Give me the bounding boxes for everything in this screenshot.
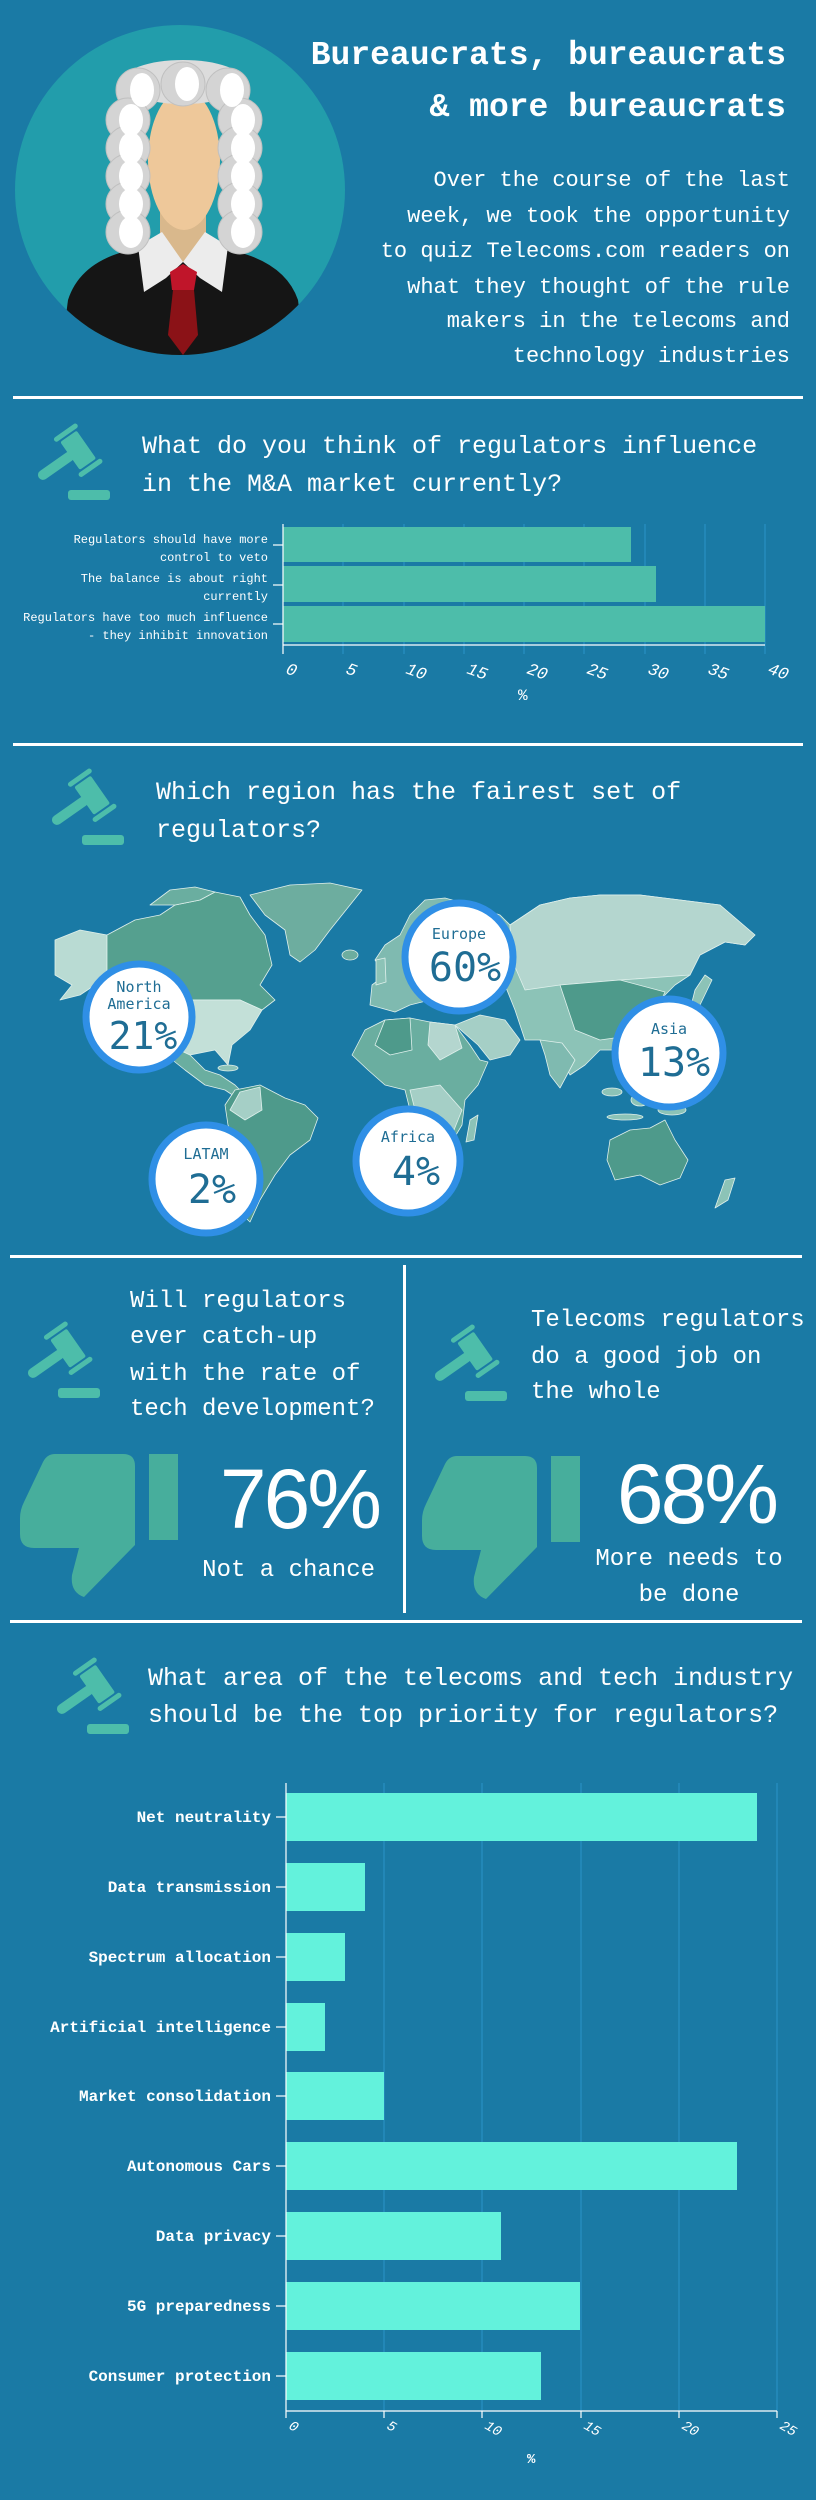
- intro text: Over the course of the last: [434, 168, 790, 193]
- bar chart: regulator priorities: Artificial intelligence: [50, 2019, 271, 2037]
- heading: priority question: What area of the telecoms and tech industry: [148, 1664, 793, 1693]
- panel: catch-up question: Not a chance: [202, 1557, 375, 1584]
- bar chart: regulator priorities: Autonomous Cars: [127, 2158, 271, 2176]
- intro text: [381, 168, 790, 369]
- intro text: what they thought of the rule: [407, 275, 790, 300]
- callout: LATAM 2%: 2%: [188, 1167, 236, 1213]
- bar chart: M&A influence: %: [518, 687, 528, 705]
- bar chart: M&A influence: - they inhibit innovation: [88, 629, 268, 643]
- callout: Asia 13%: 13%: [638, 1040, 710, 1086]
- intro text: week, we took the opportunity: [407, 204, 790, 229]
- bar chart: regulator priorities: Net neutrality: [137, 1809, 271, 1827]
- bar chart: M&A influence: 10: [403, 661, 429, 686]
- callout: North America 21%: 21%: [109, 1014, 177, 1058]
- intro text: technology industries: [513, 344, 790, 369]
- panel: catch-up question: ever catch-up: [130, 1324, 317, 1351]
- title: & more bureaucrats: [430, 89, 786, 126]
- callout: Asia 13%: Asia: [651, 1020, 687, 1038]
- heading: M&A question: in the M&A market currently?: [142, 470, 562, 499]
- callout: North America 21%: North: [116, 978, 162, 996]
- heading: priority question: should be the top priority for regulators?: [148, 1701, 778, 1730]
- bar chart: regulator priorities: 5G preparedness: [127, 2298, 271, 2316]
- bar chart: M&A influence: The balance is about right: [81, 572, 268, 586]
- bar chart: regulator priorities: 25: [776, 2418, 800, 2441]
- callout: Europe 60%: 60%: [429, 945, 501, 991]
- callout: North America 21%: [86, 964, 192, 1070]
- bar chart: M&A influence: [23, 524, 791, 705]
- panel: good job question: do a good job on: [531, 1344, 761, 1371]
- icon: gavel priority: [44, 1657, 129, 1734]
- panel: good job question: 68%: [617, 1447, 776, 1541]
- panel: good job question: be done: [639, 1582, 739, 1609]
- icon: gavel region: [39, 768, 124, 845]
- world map: [55, 883, 755, 1222]
- bar chart: M&A influence: 30: [645, 661, 671, 686]
- bar chart: M&A influence: 0: [283, 661, 299, 682]
- icon: gavel M&A: [25, 423, 110, 500]
- panel: catch-up question: with the rate of: [130, 1361, 360, 1388]
- heading: M&A question: What do you think of regulators influence: [142, 432, 757, 461]
- bar chart: M&A influence: 40: [765, 661, 791, 686]
- heading: region question: regulators?: [156, 816, 321, 845]
- callout: LATAM 2%: LATAM: [183, 1145, 229, 1163]
- bar chart: regulator priorities: 20: [678, 2418, 701, 2441]
- title: Bureaucrats, bureaucrats: [311, 37, 786, 74]
- heading: M&A question: [142, 432, 757, 499]
- heading: priority question: [148, 1664, 793, 1730]
- callout: Africa 4%: 4%: [392, 1149, 440, 1195]
- panel: good job question: Telecoms regulators: [531, 1307, 805, 1334]
- bar chart: regulator priorities: Consumer protection: [89, 2368, 271, 2386]
- heading: region question: Which region has the fairest set of: [156, 778, 681, 807]
- bar chart: M&A influence: 15: [464, 661, 490, 686]
- bar chart: regulator priorities: 15: [580, 2418, 604, 2441]
- bar chart: M&A influence: control to veto: [160, 551, 268, 565]
- callout: Africa 4%: [356, 1109, 460, 1213]
- panel: catch-up question: tech development?: [130, 1396, 375, 1423]
- bar chart: regulator priorities: Spectrum allocation: [89, 1949, 271, 1967]
- bar chart: M&A influence: 5: [343, 661, 359, 682]
- callout: Africa 4%: Africa: [381, 1128, 435, 1146]
- heading: region question: [156, 778, 681, 845]
- panel: good job question: the whole: [531, 1379, 661, 1406]
- panel: catch-up question: [15, 1288, 379, 1597]
- panel: catch-up question: Will regulators: [130, 1288, 346, 1315]
- bar chart: regulator priorities: 10: [482, 2418, 504, 2441]
- callout: LATAM 2%: [152, 1125, 260, 1233]
- bar chart: M&A influence: currently: [203, 590, 268, 604]
- intro text: makers in the telecoms and: [447, 309, 790, 334]
- bar chart: M&A influence: 35: [705, 661, 731, 686]
- icon: gavel good job: [422, 1324, 507, 1401]
- bar chart: regulator priorities: Data privacy: [156, 2228, 271, 2246]
- callout: North America 21%: America: [107, 995, 171, 1013]
- bar chart: regulator priorities: Data transmission: [108, 1879, 271, 1897]
- illustration: judge: [15, 25, 345, 355]
- panel: good job question: More needs to: [595, 1546, 783, 1573]
- bar chart: regulator priorities: 0: [286, 2418, 301, 2437]
- panel: good job question: [422, 1307, 805, 1609]
- callout: Asia 13%: [615, 999, 723, 1107]
- bar chart: M&A influence: Regulators have too much influence: [23, 611, 268, 625]
- bar chart: M&A influence: 20: [524, 661, 550, 686]
- bar chart: regulator priorities: %: [527, 2452, 536, 2468]
- panel: catch-up question: 76%: [220, 1452, 379, 1546]
- bar chart: regulator priorities: [50, 1783, 800, 2468]
- callout: Europe 60%: [405, 903, 513, 1011]
- callout: Europe 60%: Europe: [432, 925, 486, 943]
- bar chart: M&A influence: Regulators should have more: [74, 533, 268, 547]
- bar chart: regulator priorities: Market consolidation: [79, 2088, 271, 2106]
- icon: gavel catch-up: [15, 1321, 100, 1398]
- intro text: to quiz Telecoms.com readers on: [381, 239, 790, 264]
- title: [311, 37, 786, 126]
- bar chart: M&A influence: 25: [584, 661, 610, 686]
- bar chart: regulator priorities: 5: [384, 2418, 399, 2437]
